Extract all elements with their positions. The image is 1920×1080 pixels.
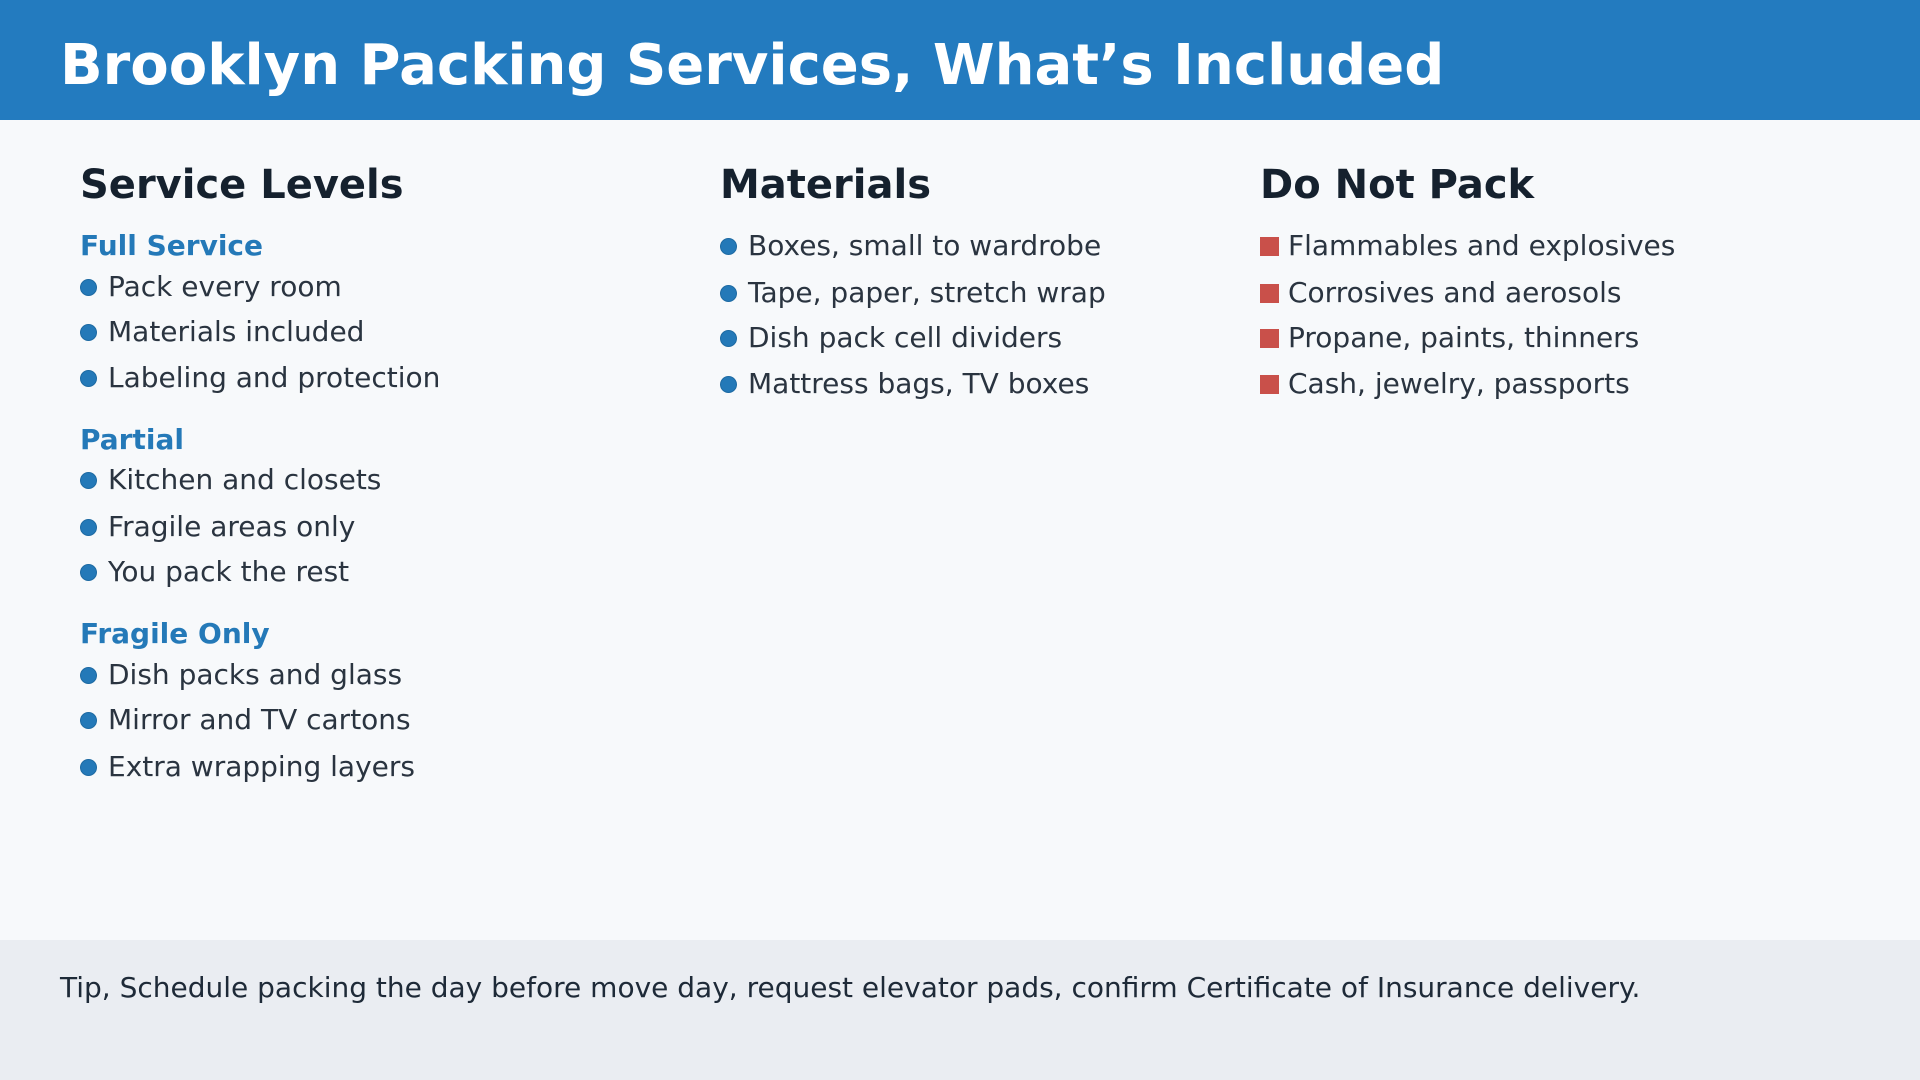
footer panel [0, 940, 1920, 1080]
item: Fragile areas only [108, 510, 355, 543]
item: Labeling and protection [108, 361, 440, 394]
heading: materials: Materials [720, 162, 931, 208]
subheading: fragile only: Fragile Only [80, 617, 270, 650]
subheading: partial: Partial [80, 423, 184, 456]
item: Tape, paper, stretch wrap [748, 276, 1106, 309]
item: Dish pack cell dividers [748, 321, 1062, 354]
item: Cash, jewelry, passports [1288, 367, 1630, 400]
item: Propane, paints, thinners [1288, 321, 1639, 354]
item: Pack every room [108, 270, 342, 303]
item: Materials included [108, 315, 364, 348]
item: Flammables and explosives [1288, 229, 1675, 262]
item: Corrosives and aerosols [1288, 276, 1621, 309]
item: Boxes, small to wardrobe [748, 229, 1101, 262]
subheading: full service: Full Service [80, 229, 263, 262]
item: You pack the rest [108, 555, 349, 588]
title: Brooklyn Packing Services, What’s Included [60, 33, 1444, 98]
item: Mattress bags, TV boxes [748, 367, 1089, 400]
header bar [0, 0, 1920, 120]
item: Mirror and TV cartons [108, 703, 411, 736]
tip text: Tip, Schedule packing the day before move day, request elevator pads, confirm Certificate of Insurance delivery. [60, 971, 1640, 1004]
item: Kitchen and closets [108, 463, 381, 496]
heading: service levels: Service Levels [80, 162, 404, 208]
heading: do not pack: Do Not Pack [1260, 162, 1534, 208]
item: Dish packs and glass [108, 658, 402, 691]
item: Extra wrapping layers [108, 750, 415, 783]
